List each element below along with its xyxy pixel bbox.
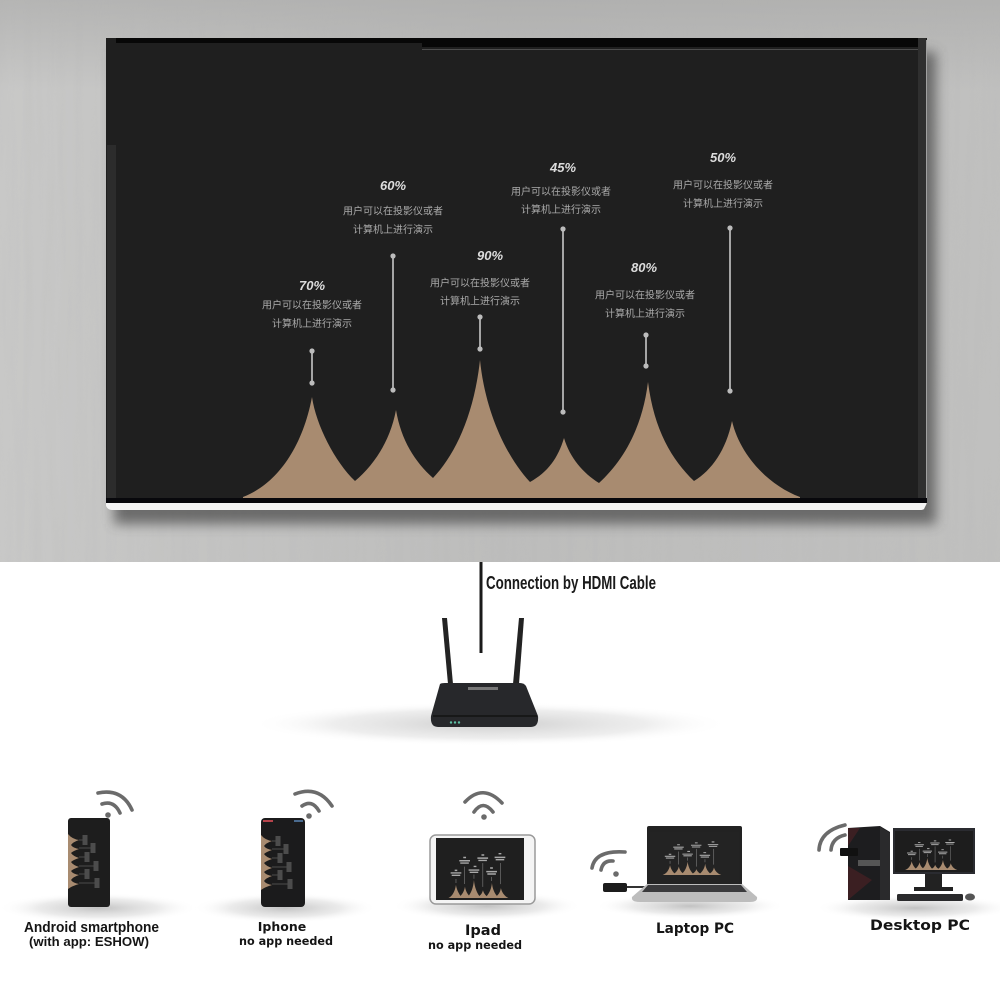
callout: 60%: 用户可以在投影仪或者 — [343, 204, 443, 218]
label: Desktop PC: Desktop PC — [870, 918, 970, 934]
label: Laptop PC: Laptop PC — [656, 921, 734, 937]
icon: wifi — [592, 852, 625, 877]
tablet body — [430, 835, 535, 904]
display top highlight line — [422, 49, 918, 50]
callout: 50%: 50% — [710, 150, 736, 165]
callout: 50% — [673, 150, 773, 394]
icon: wifi — [465, 793, 502, 820]
heading: HDMI connection label: Connection by HDMI Cable — [486, 572, 656, 593]
display right edge highlight — [926, 40, 927, 503]
usb dongle — [840, 848, 858, 856]
arrow: HDMI cable line — [480, 562, 482, 653]
display left bezel strip — [107, 145, 116, 498]
callout: 70%: 70% — [299, 278, 325, 293]
device: Desktop PC — [819, 825, 975, 901]
display bottom white bezel — [106, 503, 927, 510]
label: Android smartphone — [24, 920, 159, 949]
device: Android smartphone — [68, 792, 132, 907]
device: iPhone — [261, 791, 332, 907]
display bottom edge bar — [106, 498, 927, 503]
monitor — [893, 828, 975, 874]
laptop lid — [647, 826, 742, 886]
laptop keyboard — [642, 885, 747, 892]
phone body — [68, 818, 110, 907]
label: iPhone: no app needed — [239, 934, 333, 948]
display top-left edge bar — [116, 38, 422, 43]
label: iPad: no app needed — [428, 938, 522, 952]
device: iPad — [430, 793, 535, 904]
floor shadow: receiver — [250, 702, 730, 746]
laptop base — [632, 884, 757, 902]
display panel — [106, 38, 936, 524]
keyboard and mouse — [897, 894, 963, 901]
callout: 60%: 60% — [380, 178, 406, 193]
label: iPhone — [239, 919, 333, 948]
dongle — [603, 883, 627, 892]
callout: 80%: 计算机上进行演示 — [605, 307, 685, 320]
phone mini chart — [68, 834, 97, 889]
callout: 45%: 45% — [549, 160, 576, 175]
label: iPad — [428, 923, 522, 952]
display right bezel — [918, 38, 926, 500]
callout: 60%: 计算机上进行演示 — [353, 223, 433, 236]
tablet screen — [436, 838, 524, 900]
label: iPhone: Iphone — [258, 919, 306, 934]
phone body — [261, 818, 305, 907]
tablet mini chart — [449, 854, 508, 898]
floor shadows under devices — [0, 891, 1000, 923]
icon: wireless receiver — [431, 618, 538, 727]
monitor screen — [895, 831, 973, 872]
laptop screen — [650, 832, 739, 885]
callout: 90% — [430, 248, 530, 352]
display top edge bar — [422, 38, 918, 47]
monitor mini chart — [905, 840, 957, 870]
callout: 50%: 用户可以在投影仪或者 — [673, 178, 773, 192]
callout: 70% — [262, 278, 362, 386]
callout: 70%: 用户可以在投影仪或者 — [262, 298, 362, 312]
callout: 90%: 用户可以在投影仪或者 — [430, 276, 530, 290]
tower — [848, 826, 890, 900]
label: Android smartphone: Android smartphone — [24, 920, 159, 936]
display screen — [106, 38, 927, 504]
callout: 90%: 90% — [477, 248, 503, 263]
callout: 45%: 计算机上进行演示 — [521, 203, 601, 216]
mountain chart — [243, 360, 800, 498]
callout: 70%: 计算机上进行演示 — [272, 317, 352, 330]
callout: 80%: 80% — [631, 260, 657, 275]
display shadow — [114, 52, 936, 524]
laptop mini chart — [663, 842, 721, 875]
callout: 45%: 用户可以在投影仪或者 — [511, 185, 611, 198]
callout: 45% — [511, 160, 611, 415]
label: Android smartphone: (with app: ESHOW) — [29, 935, 149, 949]
icon: wifi — [819, 825, 845, 850]
label: iPad: Ipad — [465, 923, 501, 939]
dongle cable — [627, 886, 647, 888]
callout: 80% — [595, 260, 695, 369]
callout: 50%: 计算机上进行演示 — [683, 197, 763, 210]
callout: 90%: 计算机上进行演示 — [440, 294, 520, 308]
phone mini chart — [261, 835, 290, 890]
icon: wifi — [295, 791, 332, 819]
wall background — [0, 0, 1000, 562]
callout: 60% — [343, 178, 443, 393]
icon: wifi — [98, 792, 132, 818]
monitor stand — [914, 874, 953, 891]
callout: 80%: 用户可以在投影仪或者 — [595, 288, 695, 302]
device: Laptop — [592, 826, 757, 902]
